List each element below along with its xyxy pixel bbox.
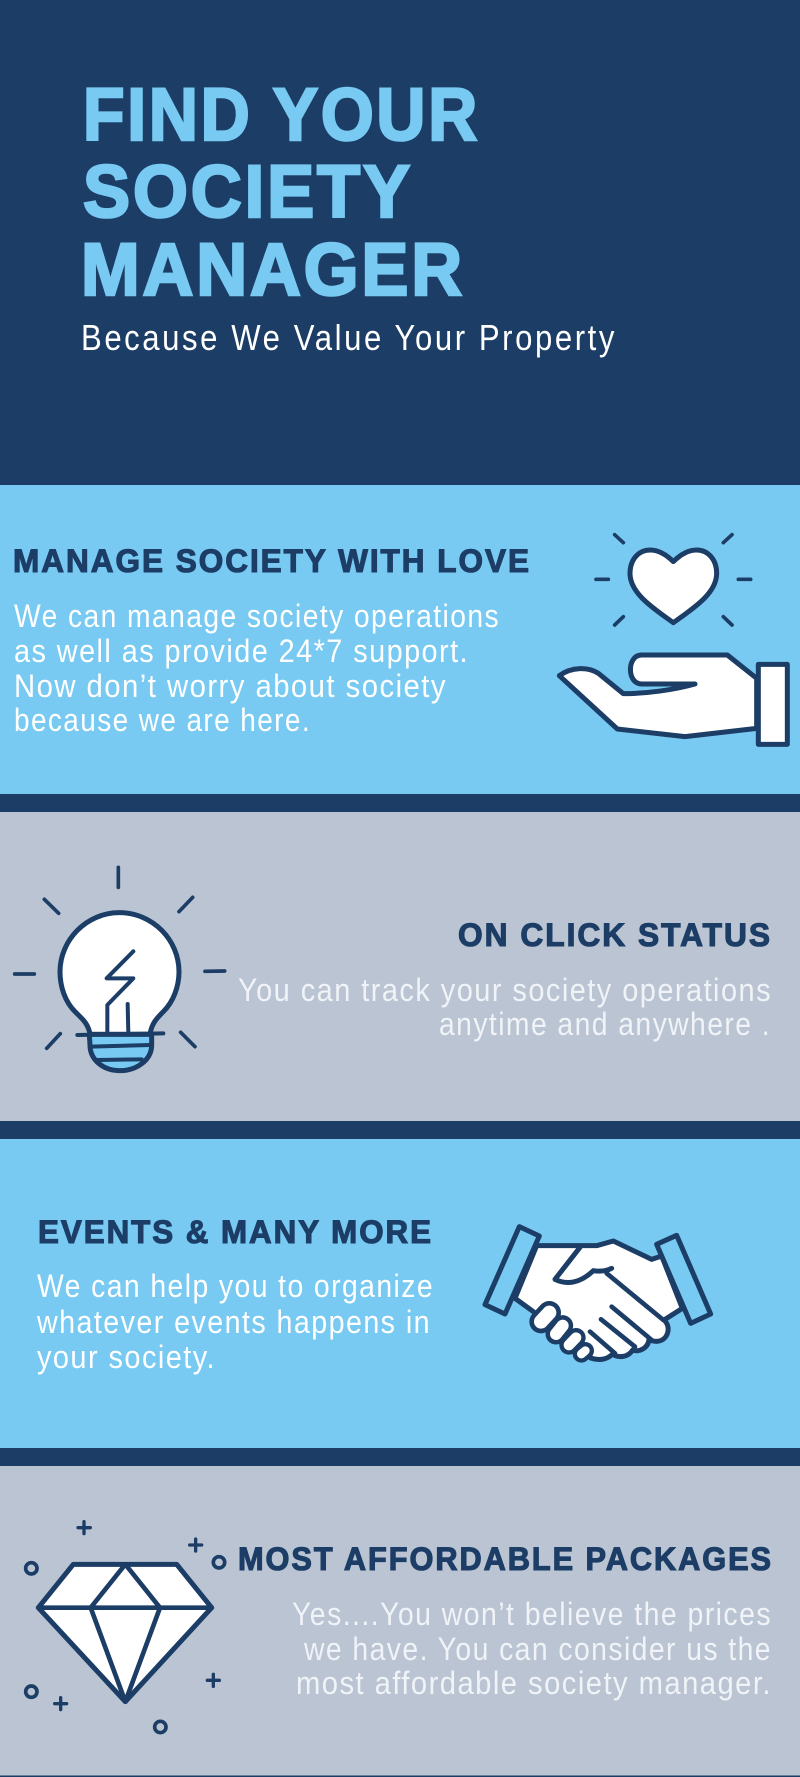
title: FIND YOUR bbox=[83, 73, 480, 156]
text block: manage society description: because we are here. bbox=[14, 702, 311, 738]
text block: manage society description bbox=[14, 598, 500, 738]
text block: affordable description bbox=[292, 1596, 772, 1701]
panel: header title bbox=[81, 73, 617, 358]
text block: on click description bbox=[238, 972, 772, 1042]
heading: manage society with love: MANAGE SOCIETY WITH LOVE bbox=[13, 543, 531, 579]
heading: events and many more: EVENTS & MANY MORE bbox=[38, 1214, 433, 1250]
panel: on click status bbox=[0, 812, 800, 1121]
title bbox=[81, 73, 480, 311]
text block: manage society description: as well as provide 24*7 support. bbox=[14, 633, 469, 669]
text block: events description bbox=[36, 1268, 434, 1375]
panel: manage society with love bbox=[0, 485, 800, 794]
icon: handshake bbox=[485, 1227, 711, 1359]
title: MANAGER bbox=[81, 228, 465, 311]
text block: events description: We can help you to organize bbox=[37, 1268, 434, 1304]
subtitle: Because We Value Your Property bbox=[81, 317, 617, 358]
fingers bbox=[541, 1313, 585, 1354]
heading: most affordable packages: MOST AFFORDABLE PACKAGES bbox=[238, 1541, 773, 1577]
text block: events description: whatever events happens in bbox=[36, 1304, 431, 1340]
icon: diamond with sparkles bbox=[26, 1522, 225, 1733]
icon: light bulb bbox=[15, 867, 225, 1071]
heading: on click status: ON CLICK STATUS bbox=[458, 917, 772, 953]
panel: most affordable packages bbox=[0, 1466, 800, 1776]
icon: heart in open hand bbox=[559, 535, 787, 744]
panel: events and many more bbox=[0, 1139, 800, 1448]
text block: manage society description: We can manage society operations bbox=[14, 598, 500, 634]
title: SOCIETY bbox=[83, 150, 413, 233]
text block: manage society description: Now don’t worry about society bbox=[14, 668, 447, 704]
text block: events description: your society. bbox=[37, 1339, 216, 1375]
